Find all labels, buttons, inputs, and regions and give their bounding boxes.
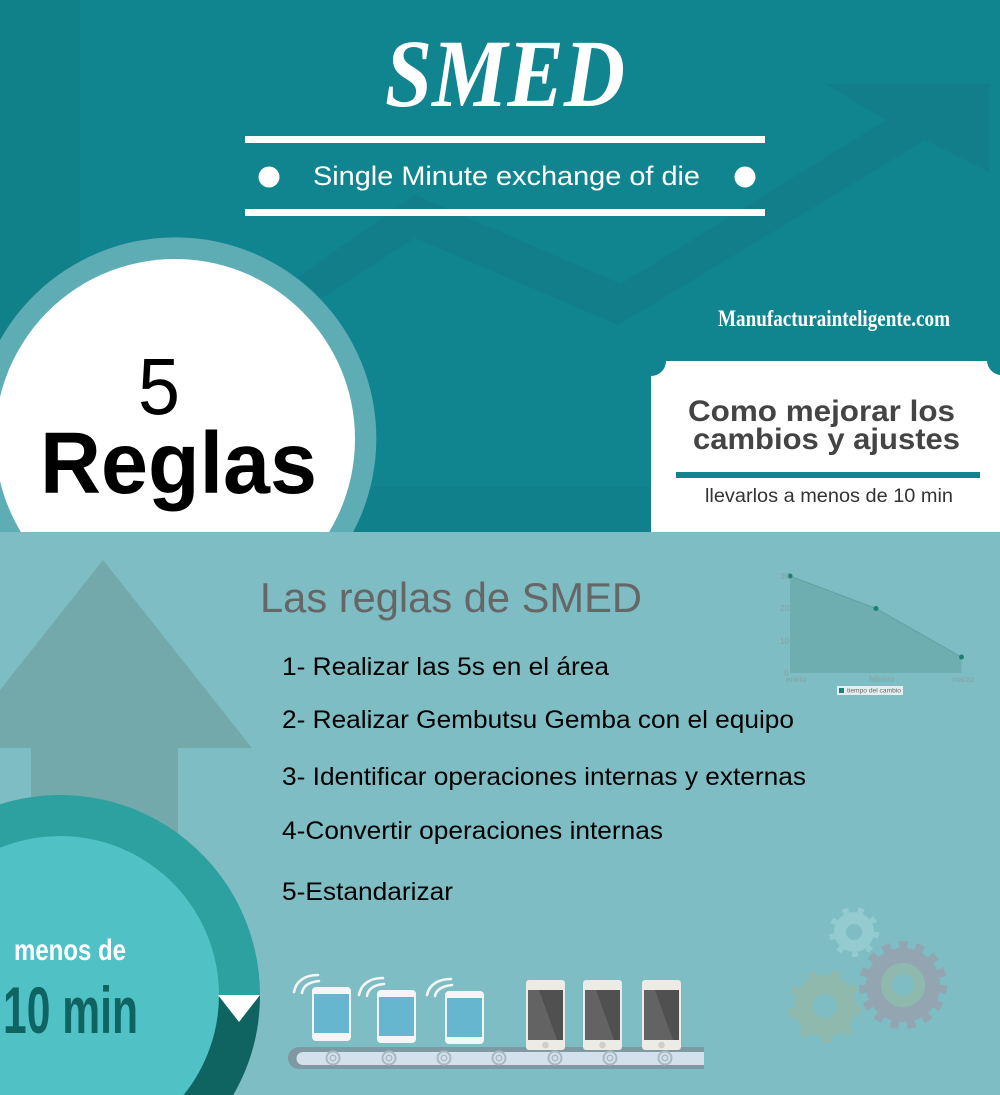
area chart: febrero	[869, 675, 895, 684]
area chart: tiempo del cambio	[847, 688, 902, 694]
icon: large up arrow	[0, 560, 252, 860]
icon: finished phones	[526, 980, 681, 1050]
panel: improvement card: Como mejorar los	[688, 395, 955, 428]
rules list: 2- Realizar Gembutsu Gemba con el equipo	[282, 706, 794, 734]
rules list: 5-Estandarizar	[282, 878, 453, 906]
rules list: 4-Convertir operaciones internas	[282, 817, 663, 845]
panel: 10 min circle	[0, 795, 260, 1095]
icon: tablets with wifi signal	[294, 975, 484, 1044]
panel: lower background	[0, 532, 1000, 1095]
rules list: 1- Realizar las 5s en el área	[282, 653, 609, 681]
area chart	[780, 572, 975, 695]
rules list	[282, 653, 806, 906]
icon: gears	[791, 910, 944, 1040]
panel: 5 Reglas circle: 5	[138, 342, 180, 431]
rules list: 3- Identificar operaciones internas y externas	[282, 763, 806, 791]
panel: 10 min circle: menos de	[14, 934, 126, 967]
subtitle banner	[245, 136, 765, 216]
panel: top header background	[0, 0, 1000, 532]
area chart: enero	[786, 675, 807, 684]
panel: 5 Reglas circle	[0, 237, 376, 532]
area chart: 10	[780, 637, 789, 646]
panel: improvement card	[651, 361, 1000, 532]
area chart: marzo	[952, 675, 975, 684]
panel: improvement card: llevarlos a menos de 10 min	[705, 486, 953, 507]
website label: Manufacturainteligente.com	[718, 306, 950, 331]
heading: Las reglas de SMED	[260, 574, 642, 621]
area chart: 20	[780, 604, 789, 613]
panel: improvement card: cambios y ajustes	[693, 423, 960, 456]
subtitle banner: Single Minute exchange of die	[313, 161, 700, 191]
area chart: 0	[784, 669, 789, 678]
panel: 5 Reglas circle: Reglas	[40, 415, 317, 512]
panel: 10 min circle: 10 min	[3, 973, 138, 1047]
title: SMED	[385, 20, 625, 127]
icon: conveyor belt	[288, 1047, 704, 1069]
area chart: 30	[780, 572, 789, 581]
